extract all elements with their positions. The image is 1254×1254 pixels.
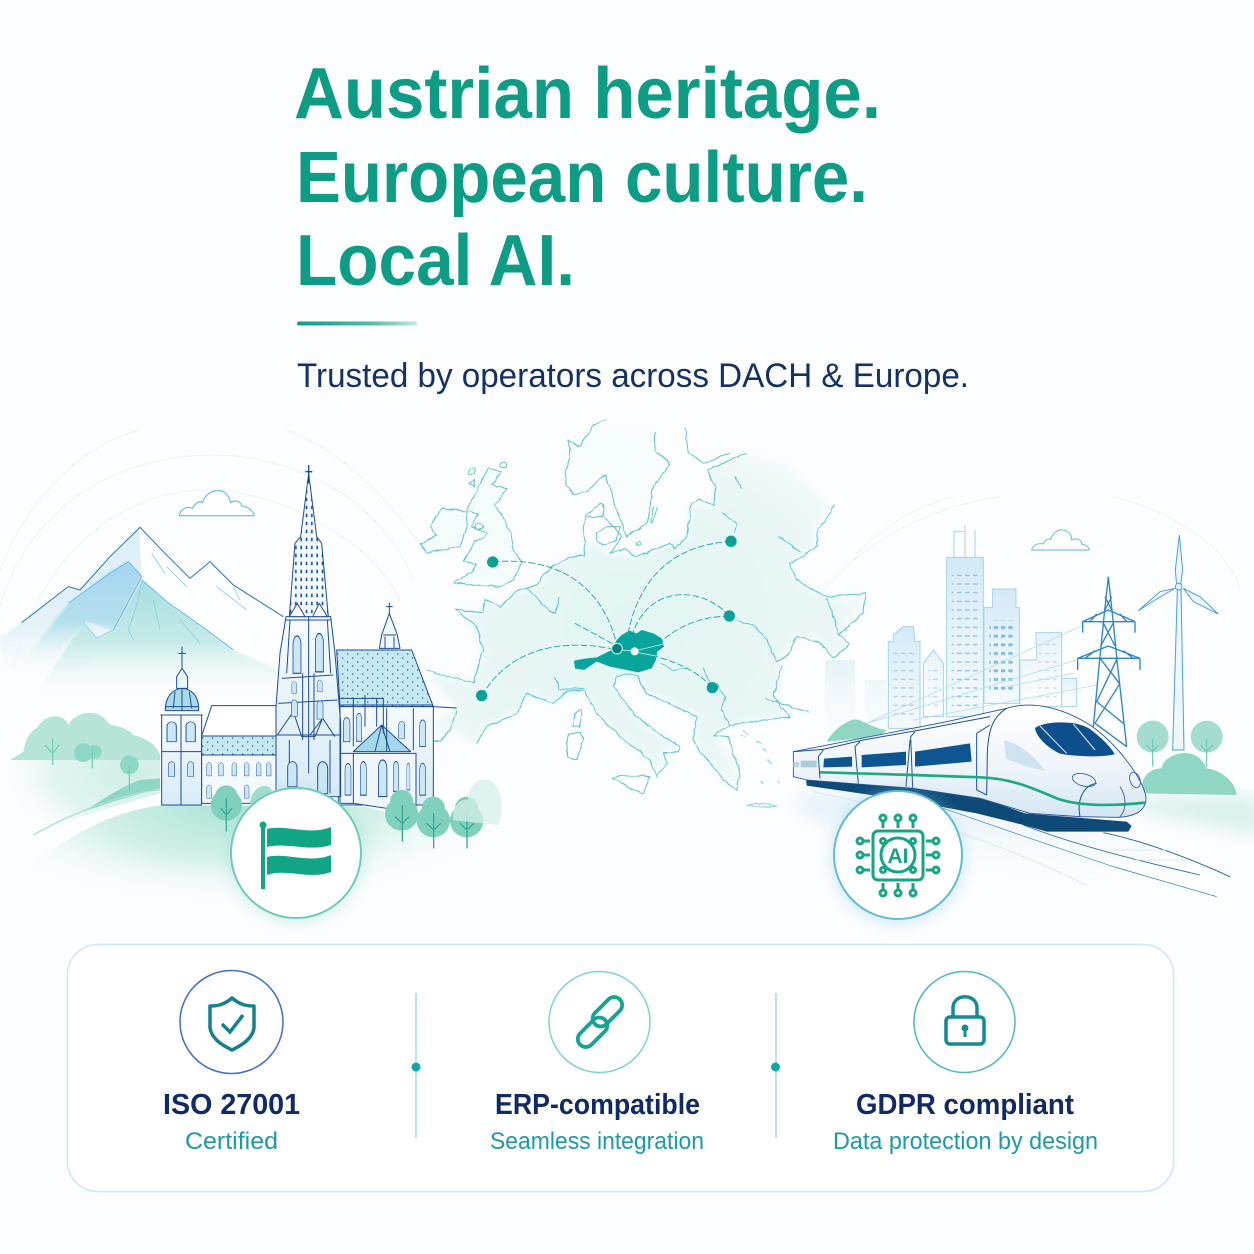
city markers [476, 536, 737, 701]
cloud [1032, 530, 1089, 550]
background trees [10, 713, 160, 835]
subtitle: Trusted by operators across DACH & Europe. [297, 357, 969, 395]
rails [813, 792, 1230, 897]
icon: AI chip: AI [888, 845, 908, 868]
title [294, 54, 881, 301]
coastlines [427, 420, 865, 807]
badge circle [834, 791, 962, 919]
main tower body [276, 617, 341, 797]
door window [1004, 740, 1045, 771]
trees and bushes [827, 719, 1237, 795]
power lines [867, 626, 1097, 723]
dotted roof left [202, 736, 276, 755]
title: Austrian heritage. [294, 54, 881, 134]
halo arcs [823, 497, 1240, 590]
foreground hill [33, 805, 567, 927]
badge glow [228, 787, 364, 923]
ground haze right [1133, 797, 1254, 837]
map tree bush [453, 779, 502, 825]
left landscape scene [0, 430, 567, 927]
subheading: Certified [185, 1128, 278, 1155]
apse roof [353, 725, 411, 752]
foreground trees [211, 785, 483, 848]
undercarriage [806, 778, 1132, 832]
white roof [202, 706, 276, 736]
title underline [297, 322, 417, 326]
dome [165, 688, 199, 711]
skyscrapers [888, 525, 1077, 728]
mid hill [0, 760, 160, 850]
spire [289, 473, 328, 617]
windows [793, 743, 972, 767]
nave roof [337, 650, 433, 707]
green stripe [820, 772, 1145, 805]
Austrian flag badge [228, 787, 364, 923]
cab windshield [1035, 723, 1114, 756]
item: ISO 27001 [163, 970, 300, 1155]
icon: shield [180, 970, 283, 1074]
connection routes [482, 541, 731, 696]
icon: chain link [549, 972, 650, 1072]
UK and Ireland [420, 462, 522, 587]
panel: trust badges [68, 944, 1174, 1192]
nave wall [338, 707, 433, 805]
item: GDPR compliant [833, 972, 1098, 1155]
heading: ISO 27001 [163, 1089, 300, 1121]
heading: ERP-compatible [495, 1089, 700, 1121]
faded background buildings [825, 660, 887, 733]
wind turbine [1138, 535, 1218, 750]
roof lines [793, 708, 1097, 817]
title: Local AI. [296, 221, 575, 301]
apse wall [340, 753, 416, 813]
badge circle [231, 788, 361, 918]
map of Europe [420, 420, 865, 807]
train body [793, 705, 1146, 817]
icon: flag [260, 822, 331, 889]
badge glow [831, 790, 965, 924]
transmission pylon [1078, 577, 1140, 747]
left tower [162, 715, 202, 805]
subheading: Seamless integration [490, 1128, 704, 1155]
halo arcs [0, 430, 430, 670]
turret [379, 603, 400, 648]
headlight [1071, 771, 1142, 817]
building windows [893, 570, 1057, 720]
cloud [179, 491, 254, 516]
track bed [800, 793, 1227, 900]
cathedral [160, 465, 457, 813]
subheading: Data protection by design [833, 1128, 1098, 1155]
gothic windows [167, 634, 426, 798]
dividers [412, 993, 780, 1138]
heading: GDPR compliant [856, 1089, 1074, 1121]
title: European culture. [296, 138, 868, 218]
Scandinavia fill [565, 423, 670, 537]
Austria highlighted [574, 630, 664, 672]
panel frame [68, 944, 1174, 1192]
icon: padlock [914, 972, 1015, 1072]
right cityscape scene [793, 497, 1254, 900]
high speed train [793, 705, 1146, 832]
item: ERP-compatible [490, 972, 704, 1155]
left wing wall [202, 755, 276, 803]
mountains [0, 527, 287, 717]
AI chip badge [831, 790, 965, 924]
land fill [427, 453, 865, 790]
lantern [177, 647, 188, 688]
Vienna and Zurich hub markers [612, 643, 663, 656]
